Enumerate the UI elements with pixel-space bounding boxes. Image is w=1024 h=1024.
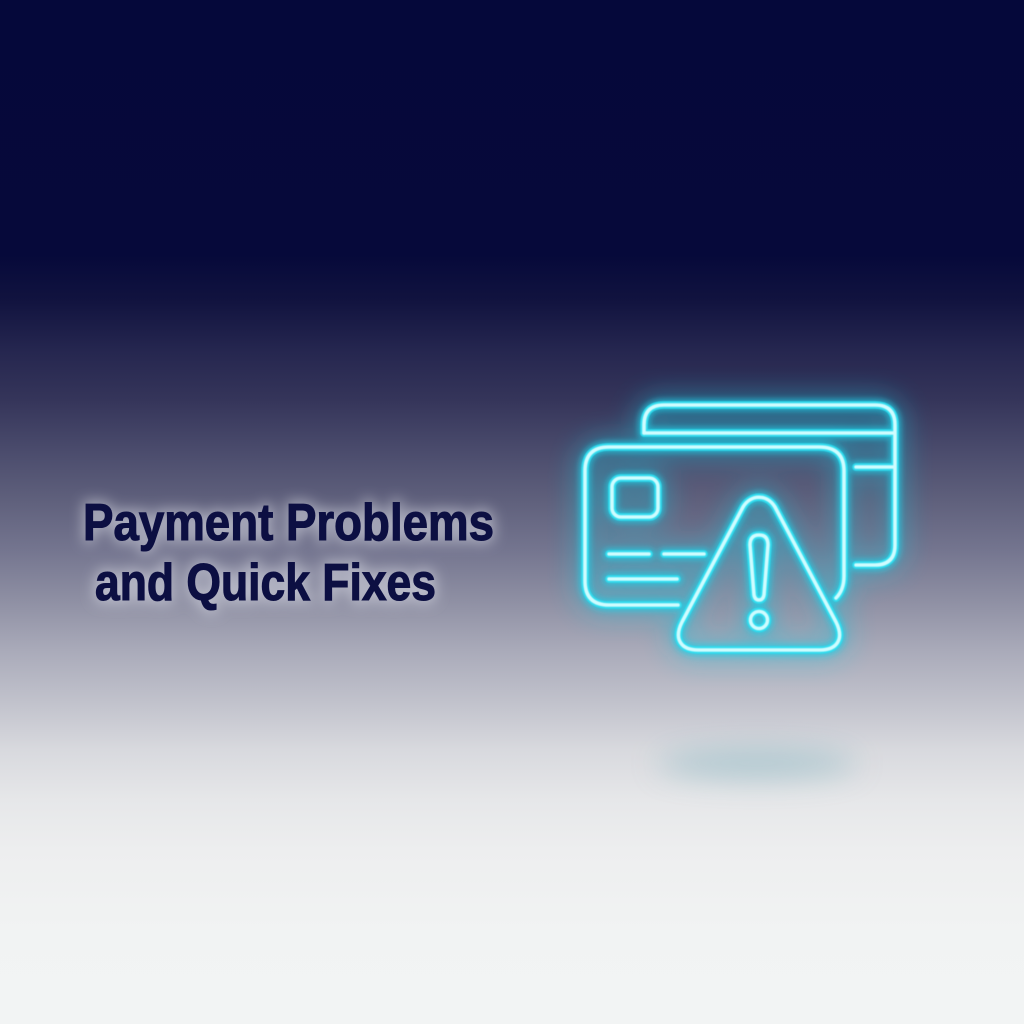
title (83, 494, 494, 612)
icon: credit cards with warning triangle (585, 405, 895, 650)
title: and Quick Fixes (95, 554, 436, 612)
floating shadow under icon (657, 749, 857, 777)
title: and Quick Fixes (95, 554, 436, 612)
title: Payment Problems (83, 494, 494, 552)
title: Payment Problems (83, 494, 494, 552)
